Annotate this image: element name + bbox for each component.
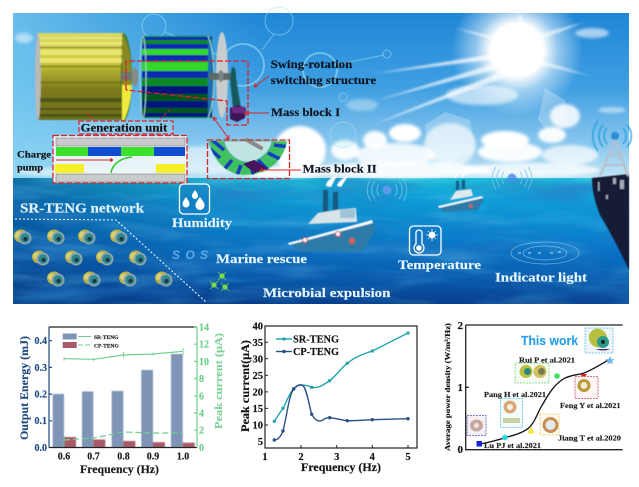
sea background <box>13 178 629 304</box>
label: charge pump: pump <box>17 164 43 174</box>
right axis tick labels: 4 <box>199 408 204 420</box>
SR-TENG network nodes <box>14 230 172 286</box>
legend: CP-TENG <box>94 344 119 350</box>
x axis tick labels: 2 <box>298 452 304 463</box>
label: marine rescue: Marine rescue <box>216 252 308 266</box>
icon: temperature thermometer and sun <box>410 226 441 255</box>
y axis tick labels: 2 <box>458 320 464 332</box>
legend <box>276 334 339 358</box>
x axis tick labels: 5 <box>405 452 411 463</box>
y axis tick labels: 40 <box>252 322 263 332</box>
y axis tick labels: 35 <box>252 338 263 349</box>
line: CP-TENG <box>273 385 410 442</box>
label: humidity: Humidity <box>172 216 233 230</box>
right axis tick labels: 8 <box>199 374 204 385</box>
left axis tick labels: 0.4 <box>34 336 47 347</box>
bars: SR-TENG and CP-TENG output energy <box>53 354 195 448</box>
y axis tick labels: 20 <box>252 388 263 398</box>
dotted network boundary <box>15 219 206 302</box>
label: swing-rotation switching structure: Swing-rotation <box>271 57 353 71</box>
label: indicator light: Indicator light <box>495 271 588 285</box>
icon: humidity water drops <box>180 184 210 214</box>
label: SOS: SOS <box>172 248 208 262</box>
red dashed mass block II frame <box>208 140 290 178</box>
y axis tick labels: 1 <box>458 382 463 394</box>
label: Lu PJ et al.2021: Lu PJ et al.2021 <box>484 441 541 450</box>
sun rays <box>372 13 590 125</box>
left axis tick labels: 0.0 <box>34 443 47 454</box>
icon: green and blue striped cylinder <box>140 36 214 118</box>
trend curve <box>479 359 610 444</box>
y axis tick labels: 0 <box>458 444 464 456</box>
clouds <box>15 28 626 178</box>
y axis tick labels: 10 <box>252 420 263 432</box>
label: charge pump: Charge <box>17 151 51 161</box>
tick marks <box>265 342 408 448</box>
icon: microbes <box>210 272 229 291</box>
chart: output energy and peak current vs frequency <box>19 322 225 476</box>
red dashed switching frame <box>126 61 248 125</box>
thumbnail: Jiang T device <box>540 414 559 435</box>
line: SR-TENG <box>273 332 410 423</box>
leader lines <box>87 76 301 172</box>
x axis tick labels: 0.7 <box>87 452 100 462</box>
right axis tick labels: 10 <box>199 357 209 368</box>
thumbnail: Rui P device <box>515 363 549 383</box>
legend: SR-TENG <box>94 335 119 341</box>
thumbnail: this work device <box>585 326 613 353</box>
label: Rui P et al.2021: Rui P et al.2021 <box>519 356 575 364</box>
right axis tick labels: 12 <box>199 340 209 350</box>
thumbnail: Feng Y device <box>575 376 598 398</box>
markers <box>476 356 614 446</box>
panel: mass block II cutaway <box>208 139 290 178</box>
left axis tick labels: 0.3 <box>34 363 47 374</box>
chart: average power density comparison <box>443 320 623 456</box>
left axis title: Output Energy (mJ) <box>19 336 31 440</box>
y axis tick labels: 15 <box>252 404 263 415</box>
right axis tick labels: 0 <box>199 443 204 454</box>
y axis tick labels <box>252 322 263 448</box>
icon: indicator light ripples <box>511 242 579 264</box>
left axis tick labels: 0.1 <box>34 416 47 427</box>
x axis tick labels: 4 <box>370 452 376 463</box>
lens flare hexagons <box>425 88 568 163</box>
label: mass block II: Mass block II <box>303 162 377 176</box>
label: charge pump <box>17 151 51 174</box>
label: swing-rotation switching structure: switching structure <box>271 73 377 87</box>
x axis tick labels <box>262 452 411 463</box>
x axis tick labels: 0.8 <box>117 452 130 462</box>
label: this work: This work <box>521 334 578 348</box>
legend: CP-TENG <box>293 347 339 358</box>
x axis title: Frequency (Hz) <box>80 464 159 476</box>
icon: swing arm and mass block I <box>230 67 246 122</box>
legend <box>63 334 119 350</box>
x axis tick labels: 0.6 <box>58 452 70 462</box>
thumbnail: Lu PJ device <box>467 416 486 436</box>
x axis tick labels: 3 <box>334 452 339 463</box>
right axis tick labels: 14 <box>199 322 209 334</box>
label: swing-rotation switching structure <box>271 57 377 87</box>
left axis tick labels <box>34 336 47 454</box>
icon: signal rings on the sea <box>367 167 532 201</box>
y axis tick labels: 30 <box>252 354 263 366</box>
plot frame <box>265 326 417 448</box>
x axis tick labels <box>58 452 189 462</box>
label: Pang H et al.2021: Pang H et al.2021 <box>484 390 546 399</box>
sky background <box>13 13 629 179</box>
left axis tick labels: 0.2 <box>34 390 47 400</box>
label: SR-TENG network: SR-TENG network <box>20 201 145 216</box>
x axis title: Frequency (Hz) <box>301 462 381 474</box>
label: temperature: Temperature <box>398 258 482 272</box>
label: mass block I: Mass block I <box>271 105 340 119</box>
label: Jiang T et al.2020: Jiang T et al.2020 <box>558 434 621 443</box>
axes <box>49 327 197 448</box>
icon: generation unit yellow cylinder <box>35 32 138 121</box>
thumbnail: Pang H device <box>500 398 522 428</box>
x axis tick labels: 0.9 <box>147 452 159 462</box>
y axis tick labels <box>458 320 464 456</box>
sun <box>451 0 583 116</box>
right axis tick labels: 2 <box>199 426 204 436</box>
right axis tick labels: 6 <box>199 392 204 402</box>
y axis tick labels: 25 <box>252 371 263 382</box>
y axis title: Average power density (W/m³/Hz) <box>443 323 452 451</box>
icon: rock and signal tower <box>592 121 631 270</box>
plot frame <box>466 325 623 450</box>
icon: grey disk with axle <box>209 32 233 118</box>
right axis title: Peak current (μA) <box>214 333 225 429</box>
y axis title: Peak current(μA) <box>240 340 252 432</box>
icon: small ship <box>438 171 483 212</box>
panel: charge pump <box>53 136 187 183</box>
legend: SR-TENG <box>293 334 339 346</box>
icon: large ship <box>288 175 376 252</box>
icon: red arrow connecting cylinder to mass block II <box>213 117 229 139</box>
x axis tick labels: 1 <box>262 452 268 463</box>
lines: peak current <box>64 348 183 446</box>
chart: peak current vs frequency <box>240 322 417 474</box>
faint network icons in sky <box>142 7 391 148</box>
y axis tick labels: 5 <box>258 437 263 448</box>
right axis tick labels <box>199 322 209 454</box>
label: generation unit: Generation unit <box>81 123 167 135</box>
panel: ocean scene illustration <box>13 0 631 304</box>
label: Feng Y et al.2021: Feng Y et al.2021 <box>560 401 621 410</box>
x axis tick labels: 1.0 <box>177 452 189 462</box>
label: microbial expulsion: Microbial expulsion <box>263 286 391 300</box>
